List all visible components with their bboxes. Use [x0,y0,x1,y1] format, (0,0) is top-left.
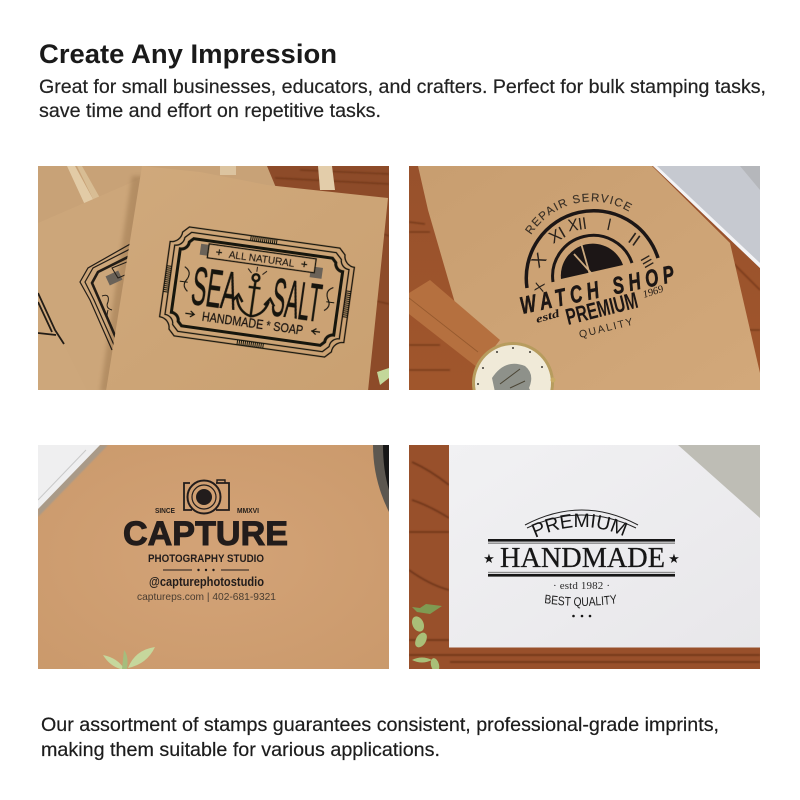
roman numerals: X [528,249,550,272]
watch shop stamp [520,193,674,339]
watch shop stamp: WATCH SHOP [518,261,677,320]
handmade stamp: BEST QUALITY [545,594,616,608]
capture stamp: captureps.com | 402-681-9321 [137,591,276,603]
intro text: save time and effort on repetitive tasks. [39,100,381,122]
capture stamp: @capturephotostudio [149,575,264,589]
title: Create Any Impression [39,39,337,69]
handmade stamp: PREMIUM [532,514,628,538]
stars: ★ [483,551,495,566]
handmade stamp: HANDMADE [500,542,665,574]
roman numerals: II [625,229,644,250]
capture stamp: SINCE [155,508,175,515]
watch shop stamp: QUALITY [578,316,634,341]
banner [200,244,208,256]
roman numerals: III [637,252,657,271]
closing text: Our assortment of stamps guarantees consistent, professional-grade imprints, [41,714,719,736]
watch shop stamp: REPAIR SERVICE [525,193,632,234]
panel: sea salt kraft bags [38,166,389,392]
watch shop stamp: PREMIUM [563,288,641,331]
watch strap [409,280,500,368]
roman numerals: X [531,281,548,293]
camera icon [184,480,229,514]
sea salt stamp: HANDMADE * SOAP [201,309,304,338]
roman numerals: XI [546,223,569,247]
plant [103,647,155,670]
handmade stamp: · estd 1982 · [553,580,610,592]
flourishes [179,266,336,312]
closing text: making them suitable for various applications. [41,739,440,761]
watch shop stamp: estd [535,308,562,326]
sea salt stamp: ALL NATURAL [228,250,295,270]
anchor [232,266,276,318]
sea salt stamp [157,225,357,359]
roman numerals: I [605,215,613,234]
plant [412,604,442,669]
closing text [41,714,719,761]
capture stamp: PHOTOGRAPHY STUDIO [148,553,264,565]
watch shop stamp: 1969 [642,284,666,301]
partial stamp on rear bag [38,243,132,350]
handmade stamp: ★ [668,551,680,566]
handmade stamp [484,510,679,618]
watch face [472,342,556,390]
panel: capture kraft paper [38,445,389,670]
roman numerals: XII [567,214,588,235]
intro text: Great for small businesses, educators, and crafters. Perfect for bulk stamping tasks, [39,76,766,98]
tick strips [164,236,350,348]
sea salt stamp: SALT [268,267,325,334]
capture stamp: CAPTURE [123,515,288,553]
capture stamp: MMXVI [237,508,259,515]
capture stamp [123,480,288,603]
panel: handmade white paper [409,445,760,669]
roman numerals [528,214,657,293]
panel: watch shop kraft paper [409,166,760,390]
intro text [39,76,766,122]
sea salt stamp: SEA [188,256,241,322]
